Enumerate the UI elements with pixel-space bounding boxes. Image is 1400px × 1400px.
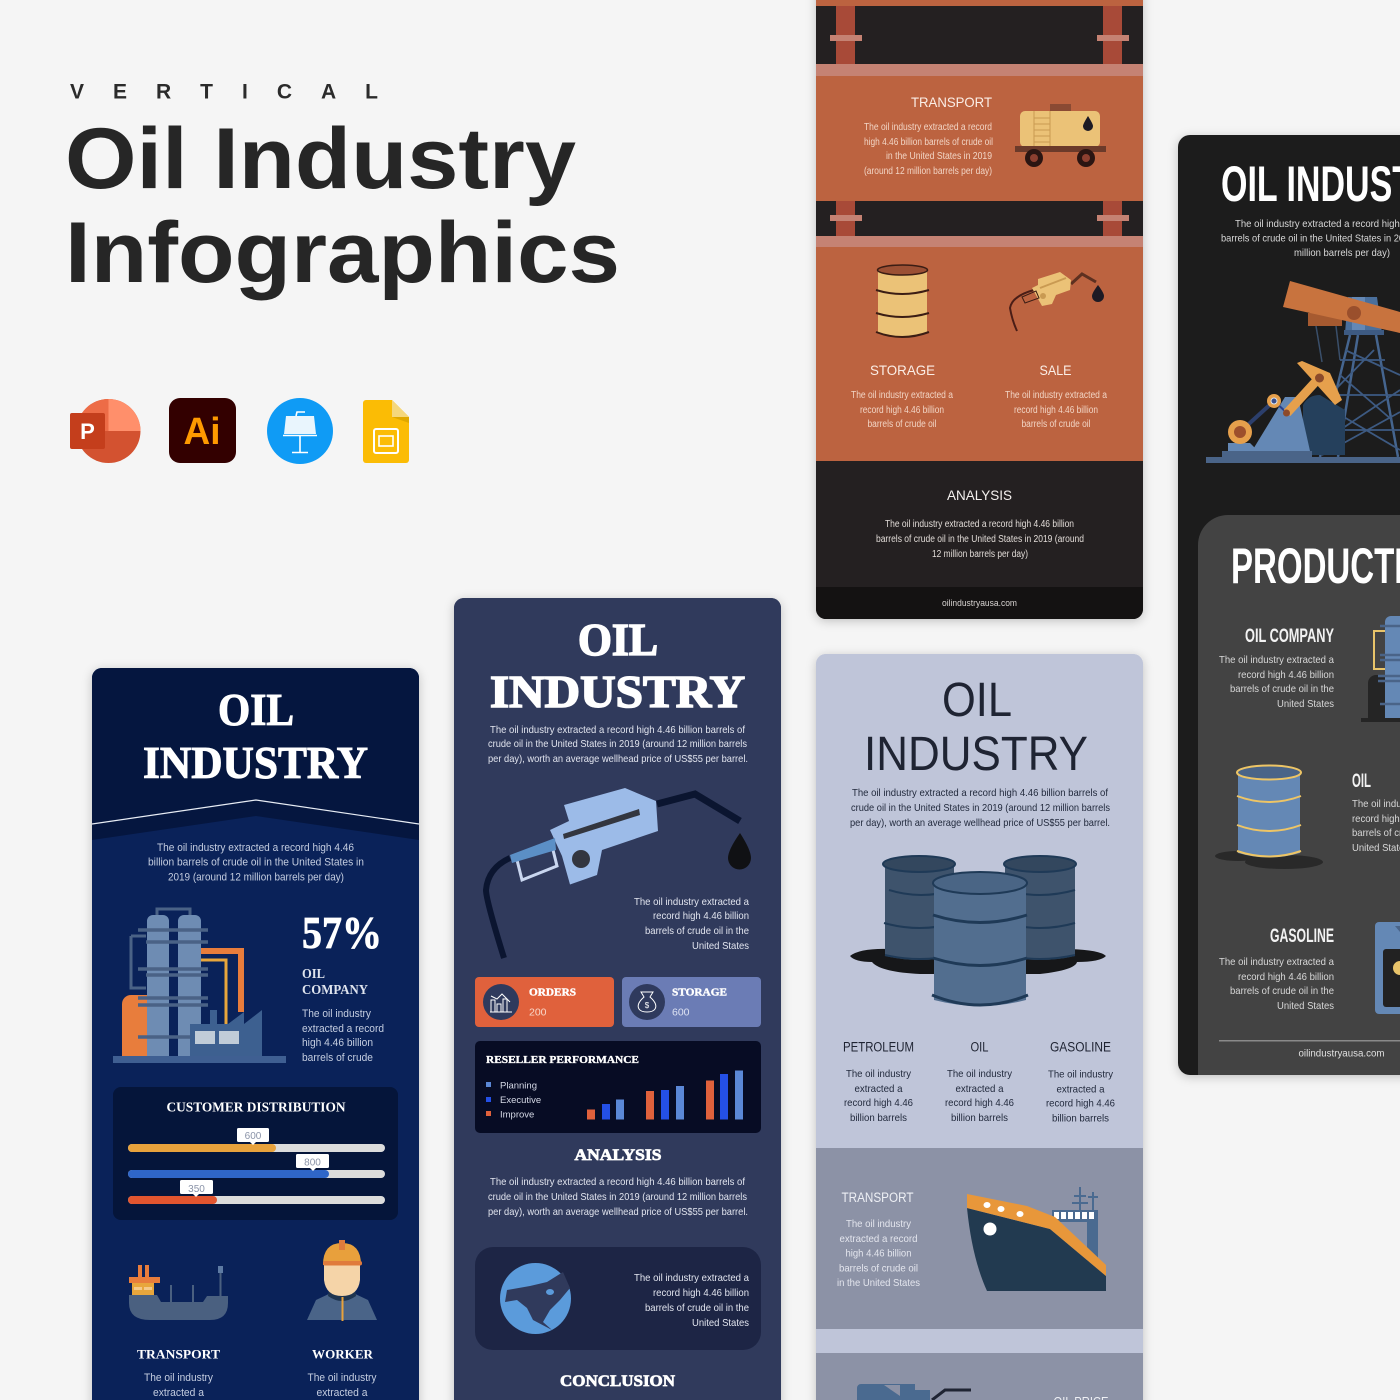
text: analysis: The oil industry extracted a record high 4.46 billion: [885, 519, 1074, 530]
card: orders: 200: [529, 1006, 547, 1018]
footer url: oilindustryausa.com: [942, 598, 1017, 609]
title: [144, 694, 368, 779]
text: transport: The oil industry: [144, 1372, 213, 1384]
subtitle: vertical: VERTICAL: [70, 80, 378, 104]
panel: globe callout: record high 4.46 billion: [653, 1287, 749, 1299]
band: oil price: [816, 1353, 1143, 1400]
text: analysis: 12 million barrels per day): [932, 549, 1028, 560]
text: worker: The oil industry: [308, 1372, 377, 1384]
stat: 57% oil company: The oil industry: [302, 1008, 371, 1020]
heading: vertical oil industry infographics: [65, 80, 620, 301]
chart: reseller performance: Improve: [500, 1110, 534, 1120]
stat: 57% oil company: [302, 907, 384, 1064]
title: oil industry infographics: Oil Industry: [65, 111, 576, 207]
title: INDUSTRY: [864, 728, 1088, 781]
icon: barrel with spill: [1215, 766, 1323, 869]
card: storage: [622, 977, 761, 1027]
text: oil company: The oil industry extracted a: [1219, 654, 1334, 666]
text: gasoline: The oil industry extracted a: [1219, 956, 1334, 968]
text: transport: in the United States in 2019: [886, 151, 992, 162]
text: petroleum: billion barrels: [850, 1112, 907, 1124]
intro text: per day), worth an average wellhead price of US$55 per barrel.: [850, 817, 1110, 829]
icon: oil barrels with spill: [850, 856, 1106, 1006]
text: transport: [137, 1350, 220, 1396]
band: transport: The oil industry: [846, 1218, 912, 1230]
text: analysis: crude oil in the United States in 2019 (around 12 million barrels: [488, 1191, 747, 1203]
icon: tanker ship: [129, 1265, 228, 1320]
icon: refinery cropped: [1361, 616, 1400, 722]
title: [490, 624, 745, 708]
icon: gas can cropped: [1375, 922, 1400, 1014]
text: gasoline: record high 4.46: [1046, 1098, 1115, 1110]
band: transport: extracted a record: [840, 1233, 918, 1245]
inner panel: production: [1198, 515, 1400, 1075]
text: transport: The oil industry extracted a record: [864, 122, 992, 133]
panel: slate oil industry infographic: [454, 598, 781, 1400]
pipes: [830, 6, 1129, 236]
chart: customer distribution: CUSTOMER DISTRIBUTION: [166, 1100, 346, 1114]
title: INDUSTRY: [143, 738, 368, 788]
text: sale: record high 4.46 billion: [1014, 405, 1098, 416]
text: nozzle caption: record high 4.46 billion: [653, 910, 749, 922]
text: gasoline: [1219, 926, 1334, 1012]
icon: barrel: [876, 265, 929, 338]
panel: globe callout: The oil industry extracted a: [634, 1272, 749, 1284]
text: transport: TRANSPORT: [137, 1346, 220, 1362]
icon: tanker wagon: [1015, 104, 1106, 167]
card: storage: STORAGE: [672, 986, 727, 998]
text: transport: high 4.46 billion barrels of crude oil: [864, 137, 993, 148]
chart: customer distribution: 800: [304, 1158, 321, 1168]
title: INDUSTRY: [490, 666, 745, 717]
title: OIL: [578, 614, 658, 665]
intro text: 2019 (around 12 million barrels per day): [168, 872, 344, 884]
text: oil: record high 4.46: [945, 1097, 1014, 1109]
title: OIL: [942, 674, 1012, 727]
heading: conclusion: CONCLUSION: [560, 1373, 675, 1390]
intro text: The oil industry extracted a record high 4.46: [157, 842, 354, 854]
icon: illustrator: Ai: [184, 411, 220, 453]
panel: globe callout: barrels of crude oil in the: [645, 1302, 749, 1314]
text: oil: [1352, 771, 1400, 854]
text: petroleum: record high 4.46: [844, 1097, 913, 1109]
text: petroleum: [843, 1040, 914, 1124]
text: gasoline: [1046, 1040, 1115, 1124]
text: storage: record high 4.46 billion: [860, 405, 944, 416]
text: sale: [1005, 362, 1107, 430]
band: transport: TRANSPORT: [842, 1190, 914, 1205]
intro text: per day), worth an average wellhead price of US$55 per barrel.: [488, 753, 748, 765]
text: analysis: [488, 1147, 748, 1218]
text: analysis: [876, 487, 1084, 560]
text: gasoline: record high 4.46 billion: [1238, 971, 1334, 983]
stat: 57% oil company: extracted a record: [302, 1023, 384, 1035]
band: transport: [816, 1148, 1143, 1329]
panel: globe callout: United States: [692, 1317, 749, 1329]
band: transport: barrels of crude oil: [839, 1262, 918, 1274]
intro text: The oil industry extracted a record high 4.46 billion barrels of: [490, 724, 745, 736]
text: nozzle caption: The oil industry extracted a: [634, 896, 749, 908]
text: transport: [864, 94, 993, 177]
text: oil: [945, 1040, 1014, 1124]
text: worker: extracted a: [316, 1387, 368, 1399]
title: [868, 682, 1087, 770]
text: analysis: ANALYSIS: [574, 1147, 662, 1164]
title: OIL: [218, 685, 294, 735]
text: oil: extracted a: [956, 1083, 1004, 1095]
text: nozzle caption: [634, 896, 749, 952]
card: storage: 600: [672, 1006, 690, 1018]
stat: 57% oil company: barrels of crude: [302, 1052, 373, 1064]
chart: customer distribution: 600: [245, 1131, 262, 1142]
panel: terracotta oil supply chain: [816, 0, 1143, 619]
text: transport: (around 12 million barrels per day): [864, 166, 992, 177]
card: orders: [475, 977, 614, 1027]
text: analysis: per day), worth an average wellhead price of US$55 per barrel.: [488, 1206, 748, 1218]
icon: small nozzle: [1010, 272, 1104, 331]
stat: 57% oil company: 57%: [302, 907, 382, 958]
card: storage: $: [645, 1001, 650, 1010]
footer: oilindustryausa.com: [1298, 1048, 1384, 1060]
intro text: crude oil in the United States in 2019 (around 12 million barrels: [488, 738, 747, 750]
icon row: file format apps: [70, 398, 409, 464]
icon: pump jack: [1206, 281, 1400, 463]
text: gasoline: GASOLINE: [1050, 1040, 1111, 1054]
icon: illustrator: [169, 398, 236, 463]
text: transport: TRANSPORT: [911, 94, 992, 110]
text: oil: billion barrels: [951, 1112, 1008, 1124]
text: storage: The oil industry extracted a: [851, 390, 953, 401]
icon: globe: [500, 1263, 571, 1334]
chart: reseller performance: Executive: [500, 1095, 541, 1106]
text: gasoline: The oil industry: [1048, 1068, 1114, 1080]
chart: reseller performance: Planning: [500, 1080, 537, 1092]
text: gasoline: barrels of crude oil in the: [1230, 985, 1334, 997]
stat: 57% oil company: high 4.46 billion: [302, 1037, 373, 1049]
text: oil: The oil industry: [947, 1068, 1013, 1080]
icon: powerpoint: [70, 399, 140, 463]
text: worker: WORKER: [312, 1346, 374, 1362]
intro text: crude oil in the United States in 2019 (around 12 million barrels: [851, 802, 1110, 814]
icon: worker: [307, 1240, 377, 1321]
text: analysis: barrels of crude oil in the United States in 2019 (around: [876, 534, 1084, 545]
panel: dark oil industry infographic: [1178, 135, 1400, 1075]
icon: refinery: [113, 909, 286, 1063]
band: transport: high 4.46 billion: [846, 1248, 912, 1260]
chart: customer distribution: 350: [188, 1184, 205, 1195]
stat: 57% oil company: OIL: [302, 966, 325, 981]
text: sale: barrels of crude oil: [1022, 419, 1090, 430]
text: storage: STORAGE: [870, 362, 935, 378]
text: sale: The oil industry extracted a: [1005, 390, 1107, 401]
text: gasoline: extracted a: [1056, 1084, 1105, 1096]
text: analysis: ANALYSIS: [947, 487, 1012, 503]
title: oil industry infographics: [65, 111, 620, 301]
title: oil industry infographics: Infographics: [65, 205, 620, 301]
intro text: billion barrels of crude oil in the United States in: [148, 856, 364, 868]
text: oil: OIL: [1352, 771, 1371, 792]
text: sale: SALE: [1040, 362, 1072, 378]
text: petroleum: PETROLEUM: [843, 1040, 914, 1054]
text: gasoline: billion barrels: [1052, 1112, 1109, 1124]
text: oil company: OIL COMPANY: [1245, 626, 1334, 647]
text: nozzle caption: barrels of crude oil in the: [645, 925, 749, 937]
text: oil: OIL: [970, 1040, 989, 1054]
icon: ship: [967, 1187, 1106, 1291]
icon: google slides: [363, 400, 409, 463]
text: oil company: record high 4.46 billion: [1238, 669, 1334, 681]
text: oil company: [1219, 626, 1334, 710]
text: storage: barrels of crude oil: [868, 419, 936, 430]
text: transport: extracted a: [153, 1387, 205, 1399]
panel: globe callout: [475, 1247, 761, 1350]
icon: fuel nozzle: [486, 788, 751, 958]
panel: navy oil industry infographic: [92, 668, 419, 1400]
intro text: The oil industry extracted a record high 4.46 billion barrels of: [852, 787, 1108, 799]
icon: keynote: [267, 398, 333, 464]
chart: reseller performance: [475, 1041, 761, 1133]
text: petroleum: The oil industry: [846, 1068, 912, 1080]
text: gasoline: GASOLINE: [1270, 926, 1334, 947]
intro text: million barrels per day): [1294, 247, 1390, 259]
card: orders: ORDERS: [529, 986, 576, 998]
text: gasoline: United States: [1277, 1000, 1334, 1012]
text: nozzle caption: United States: [692, 940, 749, 952]
text: worker: [308, 1350, 376, 1396]
intro text: [850, 787, 1110, 829]
header band: [92, 668, 419, 840]
stat: 57% oil company: COMPANY: [302, 982, 368, 997]
intro text: [148, 842, 364, 884]
chart: reseller performance: RESELLER PERFORMANCE: [486, 1054, 639, 1066]
text: petroleum: extracted a: [854, 1083, 903, 1095]
chart: customer distribution: [113, 1087, 398, 1220]
intro text: [1221, 218, 1400, 259]
text: oil company: United States: [1277, 698, 1334, 710]
icon: powerpoint: P: [80, 419, 95, 444]
text: oil company: barrels of crude oil in the: [1230, 683, 1334, 695]
text: storage: [851, 362, 953, 430]
panel: lavender oil industry infographic: [816, 654, 1143, 1400]
band: transport: in the United States: [837, 1277, 920, 1289]
intro text: [488, 724, 748, 765]
text: analysis: The oil industry extracted a record high 4.46 billion barrels of: [490, 1176, 745, 1188]
